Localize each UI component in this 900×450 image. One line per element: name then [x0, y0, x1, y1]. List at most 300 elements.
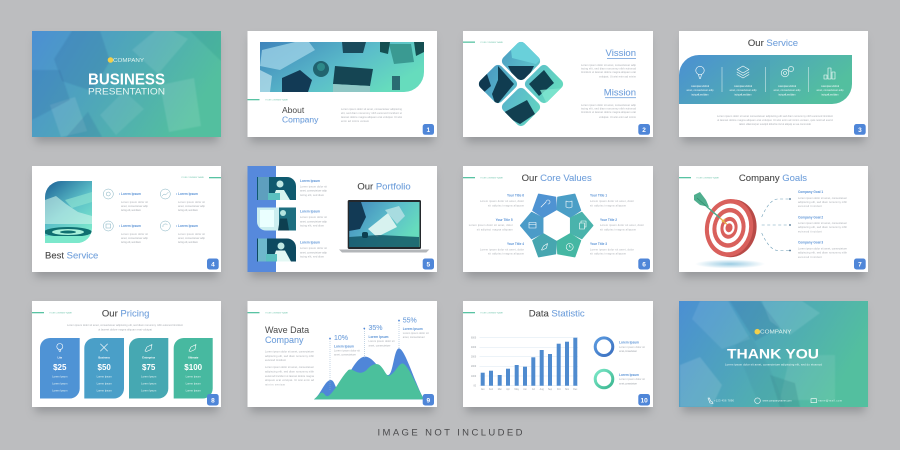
chart y axis labels	[471, 338, 477, 388]
pricing card: ultimate: Lorem Ipsum	[186, 388, 201, 392]
icon: rocket	[542, 244, 548, 250]
chart y axis labels: 6000	[471, 338, 477, 340]
data callout 55%	[398, 318, 429, 348]
service dividers	[722, 67, 809, 92]
portfolio caption 3: iscing elit, sed diam	[300, 255, 324, 259]
segment top left	[527, 188, 561, 220]
slide shadows	[35, 38, 865, 412]
accent line and section label: YOUR COMPANY NAME	[696, 177, 720, 180]
intro text: Lorem ipsum dolor sit amet, consectetuer adipiscing elit, sed diam nonummy nibh euismod tincidunt	[67, 323, 183, 327]
service item 3: • Lorem Ipsum	[119, 224, 141, 228]
chart y axis labels: 3000	[471, 356, 477, 358]
accent line and section label	[463, 312, 504, 315]
heading: Best Service	[45, 250, 98, 261]
data callout 35%	[363, 325, 395, 358]
page number	[423, 124, 434, 135]
service item 4: • Lorem Ipsum	[176, 224, 198, 228]
value 1	[590, 194, 634, 207]
slide 10: data statistic	[463, 301, 653, 407]
vission text: iscing elit, sed diam nonummy nibh euismod	[581, 66, 637, 70]
value 2: Lorem ipsum dolor sit amet, dolor	[600, 223, 644, 227]
chart month labels: Aug	[540, 388, 544, 391]
logo: COMPANY	[760, 330, 792, 336]
accent line and section label: YOUR COMPANY NAME	[265, 99, 289, 102]
service item 4	[160, 221, 206, 244]
service item 2: Lorem ipsum dolor sit	[178, 200, 205, 204]
description text: Lorem ipsum dolor sit amet, consectetuer	[265, 350, 314, 354]
accent line and section label	[32, 312, 73, 315]
value 3: sit adipisci magna aliquam	[590, 252, 626, 256]
donut label 2: amet, consectetuer	[619, 381, 637, 385]
service captions: amet, consectetuer adip	[774, 88, 801, 92]
service band	[679, 55, 852, 104]
value 5	[469, 218, 513, 231]
segment bottom right	[552, 231, 586, 263]
pricing card: ultimate: $100	[184, 363, 203, 372]
page number: 6	[642, 262, 646, 268]
value 1: Lorem ipsum dolor sit amet, dolor	[590, 199, 634, 203]
donut label 1	[619, 340, 645, 353]
body text	[717, 114, 833, 126]
service captions: iscing elit, sed diam	[778, 92, 796, 96]
page number: 7	[858, 262, 862, 268]
description text: adipiscing elit, sed diam nonummy nibh	[265, 354, 315, 358]
chart month labels: May	[515, 389, 520, 391]
value 4: Your Title 4	[507, 242, 524, 246]
vission text: volutpat. Ut wisi enim ad minim	[599, 74, 636, 78]
heading: About	[282, 105, 305, 115]
icon: map	[566, 201, 572, 208]
connector end dots	[789, 198, 791, 251]
logo: COMPANY	[113, 58, 144, 64]
chart month labels: Dec	[573, 389, 578, 391]
page number	[207, 258, 219, 270]
paragraph: laoreet dolore magna aliquam erat volutpat. Ut wisi	[341, 115, 402, 119]
service captions: amet, consectetuer adip	[816, 88, 844, 92]
laptop with photo	[339, 200, 429, 252]
service item 2: iscing elit, sed diam	[178, 208, 198, 212]
body text: Lorem ipsum dolor sit amet consectetuer adipiscing elit sed diam nonummy nibh euismod tincidunt	[717, 114, 833, 118]
thank you subtitle: Lorem ipsum dolor sit amet, consectetuer adipiscing elit, sed do eiusmod	[725, 362, 822, 366]
accent line and section label	[679, 177, 720, 180]
page number: 5	[426, 262, 430, 268]
page number	[854, 124, 866, 135]
goal 1: adipiscing elit, sed diam nonummy nibh	[798, 200, 848, 204]
blue side strip	[248, 166, 276, 272]
value 3: Lorem ipsum dolor sit amet, dolor	[590, 247, 634, 251]
vission text: Lorem ipsum dolor sit amet, consectetuer adip	[581, 63, 637, 67]
description text: aliquam erat volutpat. Ut wisi enim ad	[265, 378, 315, 382]
contact: email	[811, 398, 842, 403]
value 6: Lorem ipsum dolor sit amet, dolor	[480, 199, 524, 203]
value 4: Lorem ipsum dolor sit amet, dolor	[480, 247, 524, 251]
page number	[638, 124, 650, 135]
accent line and section label	[248, 312, 289, 315]
body text: ut laoreet dolore magna aliquam erat volutpat. Ut wisi enim ad minim veniam, quis nostrud exerci	[717, 118, 833, 122]
body text: tation ullamcorper suscipit lobortis nisl ut aliquip ex ea commodo	[739, 122, 812, 126]
pricing card: lite: Lite	[57, 356, 63, 360]
portfolio caption 3: amet, consectetuer adip	[300, 250, 328, 254]
service item 1	[103, 189, 149, 212]
chart month labels: Nov	[565, 389, 570, 391]
mission text: iscing elit, sed diam nonummy nibh euismod	[581, 106, 637, 110]
heading: Wave Data	[265, 325, 309, 335]
slide 9: wave data	[248, 301, 437, 407]
data callout 55%: Lorem ipsum dolor sit	[403, 331, 429, 335]
data callout 10%: Lorem Ipsum	[334, 344, 354, 348]
pricing card: ultimate: Lorem Ipsum	[186, 374, 201, 378]
page number: 4	[211, 262, 215, 268]
slide 7: company goals	[679, 166, 868, 272]
mission text: volutpat. Ut wisi enim ad minim	[599, 115, 636, 119]
portfolio caption 2: Lorem Ipsum	[300, 210, 320, 214]
page number: 1	[426, 127, 430, 134]
portfolio photo 1	[257, 177, 296, 200]
donut label 1: amet, consectetuer	[619, 349, 637, 353]
pricing card: business: $50	[98, 363, 111, 372]
pricing card: business: Lorem Ipsum	[97, 388, 112, 392]
diamond photo grid	[478, 42, 564, 126]
value 6: sit adipisci magna aliquam	[488, 203, 524, 207]
data callout 10%	[329, 335, 360, 390]
closing photo overlay	[680, 301, 835, 407]
data callout 55%: Lorem Ipsum	[403, 327, 423, 331]
page number	[638, 258, 650, 270]
mission text	[581, 103, 637, 119]
pricing card: ultimate: Lorem Ipsum	[186, 381, 201, 385]
portfolio caption 1: amet, consectetuer adip	[300, 188, 328, 192]
contact: website	[755, 398, 792, 404]
heading accent: Company	[282, 115, 319, 125]
service item 2: amet, consectetuer adip	[178, 204, 206, 208]
goal 2: adipiscing elit, sed diam nonummy nibh	[798, 225, 848, 229]
paragraph: elit, sed diam nonummy nibh euismod tincidunt ut	[341, 111, 402, 115]
accent line and section label: YOUR COMPANY NAME	[265, 312, 289, 315]
icon: gears	[781, 66, 794, 77]
service item 1: Lorem ipsum dolor sit	[121, 200, 148, 204]
pricing card: lite: Lorem Ipsum	[52, 374, 67, 378]
chart month labels: Jul	[532, 389, 535, 391]
accent line and section label	[463, 177, 504, 180]
mission heading: Mission	[604, 87, 636, 98]
icon: wrench	[541, 200, 550, 207]
description text: Lorem ipsum dolor sit amet, consectetuer	[265, 365, 314, 369]
heading: Data Statistic	[529, 309, 585, 320]
service captions: Lorem ipsum dolor sit	[778, 84, 796, 88]
goal 3	[798, 240, 848, 259]
mission text: tincidunt ut laoreet dolore magna aliquam erat	[581, 110, 636, 114]
heading: Our Portfolio	[357, 181, 411, 192]
icon: bar chart	[824, 68, 835, 79]
value 4	[480, 242, 524, 256]
service captions: Lorem ipsum dolor sit	[821, 84, 839, 88]
slide 3: our service	[679, 31, 868, 137]
chart month labels: Feb	[489, 389, 494, 391]
heading: Our Service	[748, 38, 798, 49]
donut label 2: Lorem Ipsum	[619, 373, 639, 377]
data callout 55%: amet, consectetuer	[403, 335, 425, 339]
goal 3: euismod tincidunt	[798, 255, 822, 259]
goal 1: euismod tincidunt	[798, 204, 822, 208]
heading accent: Company	[265, 335, 304, 345]
goal 3: Lorem ipsum dolor sit amet, consectetuer	[798, 246, 847, 250]
value 3: Your Title 3	[590, 242, 607, 246]
portfolio caption 2	[300, 210, 328, 228]
pricing card: lite: $25	[53, 363, 67, 372]
paragraph	[341, 107, 403, 123]
page number: 8	[211, 397, 215, 404]
portfolio caption 2: iscing elit, sed diam	[300, 224, 324, 228]
value 3	[590, 242, 634, 256]
photo banner	[260, 42, 424, 92]
heading: Our Core Values	[522, 173, 592, 184]
page number	[207, 394, 219, 406]
value 6	[480, 194, 524, 207]
data callout 35%: 35%	[368, 325, 383, 332]
contact: email: name@mail.com	[818, 398, 842, 402]
pricing card: enterprise	[129, 338, 168, 398]
vission heading: Vission	[606, 48, 636, 59]
accent line and section label: YOUR COMPANY NAME	[49, 312, 73, 315]
portfolio caption 3: Lorem Ipsum	[300, 240, 320, 244]
chart month labels: Mar	[498, 388, 502, 391]
cover photo overlay	[32, 25, 221, 137]
chart month labels: Jan	[481, 389, 485, 391]
pricing card: enterprise: Lorem Ipsum	[141, 374, 156, 378]
portfolio caption 3: Lorem ipsum dolor sit	[300, 246, 327, 250]
value 1: Your Title 1	[590, 194, 607, 198]
data callout 35%: amet, consectetuer	[368, 343, 391, 347]
service item 4: Lorem ipsum dolor sit	[178, 232, 205, 236]
blue wave	[314, 348, 424, 399]
value 1: sit adipisci magna aliquam	[590, 203, 626, 207]
accent line and section label	[248, 99, 289, 102]
portfolio caption 2: amet, consectetuer adip	[300, 219, 328, 223]
value 5: sit adipisci magna aliquam	[477, 227, 513, 231]
accent line and section label: YOUR COMPANY NAME	[480, 312, 504, 315]
page number	[638, 394, 650, 406]
paragraph: Lorem ipsum dolor sit amet, consectetuer adipiscing	[341, 107, 403, 111]
icon: folder	[529, 222, 536, 228]
service captions	[686, 84, 844, 96]
chart y axis labels: 2000	[471, 366, 477, 368]
cover subtitle: PRESENTATION	[88, 86, 165, 98]
vission text	[581, 63, 637, 78]
service captions: iscing elit, sed diam	[822, 92, 838, 96]
service item 3: Lorem ipsum dolor sit	[121, 232, 148, 236]
data callout 35%: Lorem ipsum dolor sit	[368, 339, 395, 343]
donut label 2	[619, 373, 645, 385]
chart month labels	[481, 388, 578, 391]
goal 2: euismod tincidunt	[798, 229, 822, 233]
contact: website: www.companyname.com	[762, 400, 792, 402]
page number: 9	[426, 397, 430, 404]
page number: 2	[642, 127, 646, 134]
pricing card: ultimate	[174, 338, 213, 398]
portfolio caption 1: iscing elit, sed diam	[300, 193, 324, 197]
service item 3: iscing elit, sed diam	[121, 240, 141, 244]
pricing card: lite: Lorem Ipsum	[52, 381, 67, 385]
description text: adipiscing elit, sed diam nonummy nibh	[265, 370, 315, 374]
target shadow	[695, 260, 765, 268]
accent line and section label: YOUR COMPANY NAME	[480, 41, 504, 44]
portfolio caption 1: Lorem Ipsum	[300, 179, 320, 183]
accent line and section label	[463, 41, 504, 44]
section label and accent line	[181, 176, 221, 179]
target	[700, 195, 761, 261]
service item 1: iscing elit, sed diam	[121, 208, 141, 212]
service item 4: iscing elit, sed diam	[178, 240, 198, 244]
page number	[854, 258, 866, 270]
goal 3: Company Goal 3	[798, 240, 823, 244]
chart month labels: Sep	[548, 389, 553, 391]
data callout 10%: amet, consectetuer	[334, 352, 356, 356]
service captions: Lorem ipsum dolor sit	[734, 84, 752, 88]
chart month labels: Apr	[506, 388, 510, 391]
logo	[108, 57, 144, 64]
pricing card: business: Business	[98, 356, 111, 360]
goal 1: Company Goal 1	[798, 190, 823, 194]
portfolio photo 2	[257, 208, 296, 230]
segment left	[521, 212, 543, 238]
intro text	[67, 323, 183, 331]
value 5: Lorem ipsum dolor sit amet, dolor	[469, 223, 513, 227]
page number	[423, 394, 434, 406]
value 2: sit adipisci magna aliquam	[600, 227, 636, 231]
chart month labels: Oct	[557, 388, 561, 391]
donut label 2: Lorem ipsum dolor sit	[619, 377, 645, 381]
contact: phone: +123 456 7890	[714, 398, 735, 402]
wave area chart	[314, 348, 424, 399]
intro text: ut laoreet dolore magna aliquam erat volutpat	[98, 327, 152, 331]
pricing card: business: Lorem Ipsum	[97, 374, 112, 378]
chart y axis labels: 1000	[471, 376, 477, 378]
section label and accent line: YOUR COMPANY NAME	[181, 176, 205, 179]
pricing card: enterprise: Lorem Ipsum	[141, 381, 156, 385]
chart month labels: Jun	[523, 389, 528, 391]
goal 1	[798, 190, 848, 208]
donut label 1: Lorem ipsum dolor sit	[619, 345, 645, 349]
goal 1: Lorem ipsum dolor sit amet, consectetuer	[798, 196, 847, 200]
pricing card: enterprise: Lorem Ipsum	[141, 388, 156, 392]
data callout 35%: Lorem Ipsum	[368, 335, 389, 339]
icon: files	[580, 221, 586, 229]
data callout 55%: 55%	[403, 318, 417, 325]
portfolio caption 3	[300, 240, 328, 259]
service captions: iscing elit, sed diam	[692, 92, 708, 96]
service item 4: amet, consectetuer adip	[178, 236, 206, 240]
value 6: Your Title 6	[507, 194, 524, 198]
slide 8: our pricing	[32, 301, 221, 407]
accent line and section label: YOUR COMPANY NAME	[480, 177, 504, 180]
icon: clock	[566, 244, 573, 250]
page number: 3	[858, 127, 862, 134]
goal 3: adipiscing elit, sed diam nonummy nibh	[798, 250, 848, 254]
slide 5: our portfolio	[248, 166, 437, 272]
segment bottom left	[527, 231, 561, 263]
footer caption: IMAGE NOT INCLUDED	[378, 428, 523, 438]
dashed connector lines	[762, 199, 790, 250]
value 2	[600, 218, 644, 231]
chart bars	[481, 338, 577, 386]
service item 1: • Lorem Ipsum	[119, 192, 141, 196]
pricing card: lite	[40, 338, 80, 398]
bar chart	[471, 338, 578, 391]
service item 3: amet, consectetuer adip	[121, 236, 149, 240]
description text: euismod tincidunt	[265, 358, 286, 362]
chart y axis labels: 4000	[471, 347, 477, 349]
portfolio photo 3	[257, 238, 296, 262]
cover title: BUSINESS	[88, 72, 165, 88]
goal 2	[798, 216, 848, 233]
donut label 1: Lorem Ipsum	[619, 340, 639, 344]
goal 2: Company Goal 2	[798, 216, 823, 220]
paragraph: enim ad minim veniam	[341, 119, 369, 123]
service item 1: amet, consectetuer adip	[121, 204, 149, 208]
slide 1: about company	[248, 31, 437, 137]
service captions: Lorem ipsum dolor sit	[691, 84, 709, 88]
page number	[423, 258, 434, 270]
mission text: Lorem ipsum dolor sit amet, consectetuer adip	[581, 103, 637, 107]
green donut	[595, 370, 613, 388]
service item 2: • Lorem Ipsum	[176, 192, 198, 196]
value 2: Your Title 2	[600, 218, 617, 222]
portfolio caption 1	[300, 179, 328, 197]
icon: light bulb	[696, 66, 704, 78]
logo	[754, 329, 792, 336]
service captions: amet, consectetuer adip	[730, 88, 757, 92]
heading: Our Pricing	[102, 309, 149, 320]
slide: business presentation cover	[32, 25, 221, 137]
icon: layers	[737, 66, 749, 78]
portfolio caption 1: Lorem ipsum dolor sit	[300, 184, 327, 188]
slide 2: vision and mission	[463, 31, 653, 137]
chart grid	[480, 338, 578, 386]
slide: thank you	[679, 301, 868, 407]
description text: minim veniam	[265, 382, 285, 386]
value 5: Your Title 5	[496, 218, 513, 222]
page number: 10	[640, 397, 648, 404]
description text	[265, 350, 315, 386]
dart	[694, 192, 727, 224]
thank you title: THANK YOU	[727, 346, 819, 362]
data callout 10%: 10%	[334, 335, 348, 342]
data callout 10%: Lorem ipsum dolor sit	[334, 348, 360, 352]
goal 2: Lorem ipsum dolor sit amet, consectetuer	[798, 221, 847, 225]
value 4: sit adipisci magna aliquam	[488, 252, 524, 256]
vission text: tincidunt ut laoreet dolore magna aliquam erat	[581, 70, 636, 74]
green wave	[314, 363, 424, 399]
service captions: amet, consectetuer adip	[686, 88, 714, 92]
photo: hand on target	[44, 181, 92, 243]
segment top right	[552, 188, 586, 220]
pentagon ring diagram	[521, 188, 593, 263]
service captions: iscing elit, sed diam	[734, 92, 752, 96]
contact: phone	[708, 398, 735, 404]
segment right	[571, 212, 593, 238]
pricing card: enterprise: Enterprise	[142, 356, 156, 360]
description text: euismod tincidunt ut laoreet dolore magna	[265, 374, 315, 378]
blue donut	[595, 338, 613, 356]
service item 2	[160, 189, 206, 212]
slide 6: core values	[463, 166, 653, 272]
portfolio caption 2: Lorem ipsum dolor sit	[300, 215, 327, 219]
slide 4: best service	[32, 166, 221, 272]
heading: Company Goals	[739, 173, 807, 184]
pricing card: ultimate: Ultimate	[188, 356, 199, 360]
pricing card: business	[84, 338, 124, 398]
service item 3	[103, 221, 149, 244]
